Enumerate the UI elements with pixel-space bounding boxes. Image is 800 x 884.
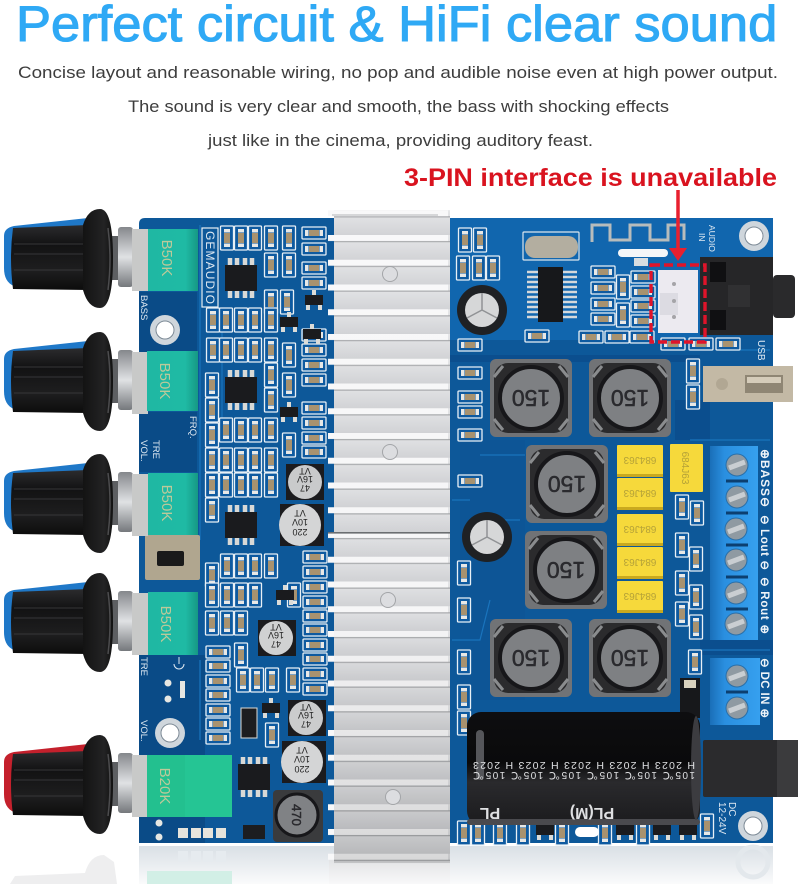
potentiometer B50K 4: B50K (157, 606, 174, 642)
large capacitor print: H 2023 H 2023 H 2023 H 2023 H 2023 (473, 759, 695, 771)
inductors 150 (273, 359, 671, 842)
inductor values: 150 (547, 557, 585, 583)
large capacitor print: PL(M) (570, 804, 614, 821)
red dashed highlight (651, 265, 705, 342)
knob: bass (4, 209, 148, 308)
other silkscreen labels right (697, 225, 766, 835)
large capacitor print: 105℃ 105℃ 105℃ 105℃ 105℃ 105℃ (473, 769, 695, 780)
crystal oscillator (523, 232, 579, 260)
capacitor markings: 684J63 (623, 487, 656, 498)
board silkscreen labels left: TRE (150, 440, 161, 459)
DC power jack (703, 740, 798, 797)
potentiometer B50K 1: B50K (158, 240, 175, 276)
capacitor values: 16V (298, 710, 314, 720)
terminal labels (758, 449, 772, 718)
large capacitor print (473, 759, 695, 821)
capacitor values: 10V (292, 517, 308, 527)
electrolytic capacitor middle (462, 512, 512, 562)
other silkscreen labels right: IN (697, 233, 707, 242)
board silkscreen labels left: TRE (138, 657, 149, 676)
electrolytic capacitor top (457, 285, 507, 335)
knob: treble (4, 573, 148, 672)
large capacitor (467, 712, 701, 825)
op-amp chips (225, 258, 270, 797)
bluetooth antenna (592, 225, 684, 266)
potentiometer B50K 4 (148, 592, 198, 655)
terminal labels: ⊕BASS⊖ (758, 449, 772, 507)
capacitor markings (623, 452, 690, 601)
slide switch (145, 535, 200, 580)
heatsink (328, 210, 450, 863)
board silkscreen labels left: VOL. (138, 440, 149, 462)
capacitor values: 16V (297, 474, 313, 484)
inductor values: 150 (512, 385, 550, 411)
mounting holes (150, 221, 769, 841)
capacitor values: 10V (294, 754, 310, 764)
text block: description: just like in the cinema, providing auditory feast. (207, 131, 593, 150)
bluetooth chip (527, 267, 577, 322)
SMD components left (156, 226, 327, 840)
capacitor markings: 684J63 (623, 454, 656, 465)
capacitor markings: 684J63 (623, 590, 656, 601)
capacitor markings: 684J63 (623, 556, 656, 567)
callout: 3-PIN interface: 3-PIN interface is unavailable (404, 164, 777, 192)
board silkscreen labels left: VOL. (138, 720, 149, 742)
terminal labels: ⊖ DC IN ⊕ (758, 658, 770, 718)
small electrolytic capacitors (258, 464, 326, 783)
potentiometer B50K 1 (148, 229, 198, 291)
capacitor markings: 684J63 (679, 452, 690, 485)
capacitor values: 47 (301, 719, 311, 729)
3-pin white connector (658, 270, 698, 333)
capacitor values: VT (300, 702, 312, 712)
inductor values (289, 385, 649, 826)
potentiometer B20K (147, 755, 232, 817)
board silkscreen labels left: GEMAUDIO (203, 231, 217, 304)
terminal labels: ⊖ Lout ⊖ (758, 515, 770, 570)
large capacitor print: PL (480, 804, 500, 821)
capacitor values: VT (296, 745, 308, 755)
circuit board (139, 218, 773, 843)
USB connector (703, 366, 793, 402)
inductor values: 150 (611, 385, 649, 411)
potentiometer B50K 2: B50K (156, 363, 173, 399)
terminal labels: ⊖ Rout ⊕ (758, 577, 770, 634)
text block: description: The sound is very clear and smooth, the bass with shocking effects (128, 97, 669, 116)
inductor values: 150 (611, 645, 649, 671)
red arrow (669, 190, 687, 261)
audio jack (700, 257, 795, 335)
other silkscreen labels right: USB (755, 340, 766, 361)
board silkscreen labels left: BASS (138, 295, 149, 320)
capacitor values: VT (294, 508, 306, 518)
capacitor values: VT (299, 466, 311, 476)
capacitor markings: 684J63 (623, 523, 656, 534)
potentiometer B50K 2 (147, 351, 198, 411)
knob: volume (4, 735, 148, 834)
capacitor values: 220 (292, 527, 308, 537)
other silkscreen labels right: DC (726, 802, 737, 816)
capacitor values (268, 466, 314, 774)
output screw terminal (710, 446, 758, 640)
potentiometer B50K 3: B50K (158, 485, 175, 521)
inductor values: 470 (289, 804, 304, 826)
potentiometer B20K: B20K (156, 768, 173, 804)
capacitor values: 47 (300, 483, 310, 493)
inductor values: 150 (512, 645, 550, 671)
board reflection (10, 846, 773, 884)
text block: description: Concise layout and reasonable wiring, no pop and audible noise even at high power output. (18, 63, 778, 82)
inductor values: 150 (548, 471, 586, 497)
capacitor values: 47 (271, 639, 281, 649)
knob: frequency (4, 332, 148, 431)
yellow film capacitors (617, 444, 703, 613)
board silkscreen labels left (138, 228, 218, 742)
potentiometer B50K 3 (148, 473, 198, 535)
bottom pads (178, 828, 226, 838)
capacitor values: VT (270, 622, 282, 632)
board silkscreen labels left: FRQ. (187, 416, 198, 439)
other silkscreen labels right: 12-24V (716, 802, 727, 835)
capacitor values: 220 (294, 764, 310, 774)
other silkscreen labels right: AUDIO (707, 225, 717, 252)
capacitor values: 16V (268, 630, 284, 640)
DC input screw terminal (710, 658, 760, 725)
knob: treble volume (4, 454, 148, 553)
SMD components right (456, 228, 740, 845)
text block: description (18, 63, 778, 150)
